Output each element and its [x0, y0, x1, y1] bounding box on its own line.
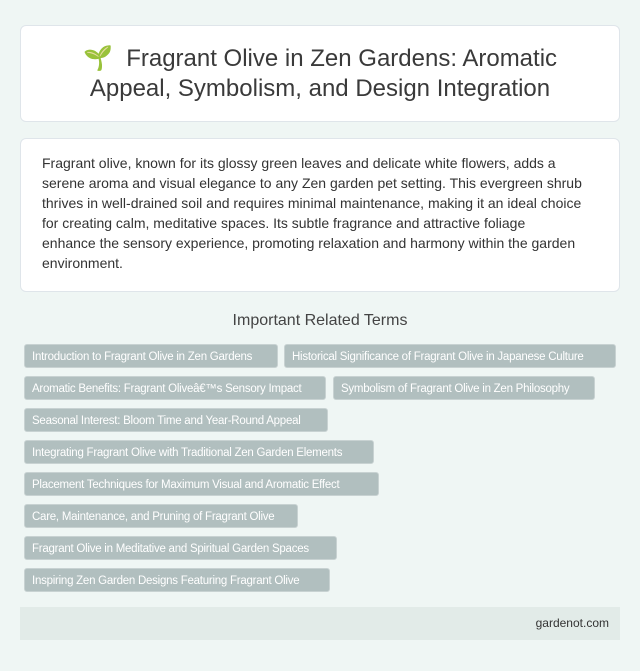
tag 7: Placement Techniques for Maximum Visual and Aromatic Effect — [32, 479, 339, 491]
description card — [20, 138, 620, 292]
description text: Fragrant olive, known for its glossy green leaves and delicate white flowers, adds a — [42, 155, 556, 171]
footer — [20, 607, 620, 640]
tag 2 — [284, 344, 616, 368]
description text: serene aroma and visual elegance to any Zen garden pet setting. This evergreen shrub — [42, 175, 582, 191]
description text: for creating calm, meditative spaces. Its subtle fragrance and attractive foliage — [42, 215, 525, 231]
tag 1 — [24, 344, 278, 368]
tag 6 — [24, 440, 374, 464]
tag 8 — [24, 504, 298, 528]
tag 4 — [333, 376, 595, 400]
description text: environment. — [42, 255, 123, 271]
tag 3 — [24, 376, 326, 400]
tag 7 — [24, 472, 379, 496]
footer: gardenot.com — [536, 616, 609, 630]
tag 2: Historical Significance of Fragrant Olive in Japanese Culture — [292, 351, 584, 363]
tag 5 — [24, 408, 328, 432]
tag 5: Seasonal Interest: Bloom Time and Year-Round Appeal — [32, 415, 301, 427]
title card — [20, 25, 620, 122]
tag 10 — [24, 568, 330, 592]
description text: thrives in well-drained soil and requires minimal maintenance, making it an ideal choice — [42, 195, 581, 211]
description text: enhance the sensory experience, promoting relaxation and harmony within the garden — [42, 235, 575, 251]
tag 10: Inspiring Zen Garden Designs Featuring Fragrant Olive — [32, 575, 299, 587]
tag 6: Integrating Fragrant Olive with Traditional Zen Garden Elements — [32, 447, 342, 459]
description text — [42, 155, 582, 271]
section heading: Important Related Terms — [233, 312, 407, 329]
tag 9 — [24, 536, 337, 560]
tag 9: Fragrant Olive in Meditative and Spiritual Garden Spaces — [32, 543, 309, 555]
tag 3: Aromatic Benefits: Fragrant Oliveâ€™s Sensory Impact — [32, 383, 302, 395]
tag 4: Symbolism of Fragrant Olive in Zen Philosophy — [341, 383, 569, 395]
title: 🌱 Fragrant Olive in Zen Gardens: Aromatic Appeal, Symbolism, and Design Integration — [83, 45, 557, 102]
tag 1: Introduction to Fragrant Olive in Zen Gardens — [32, 351, 252, 363]
tag 8: Care, Maintenance, and Pruning of Fragrant Olive — [32, 511, 274, 523]
